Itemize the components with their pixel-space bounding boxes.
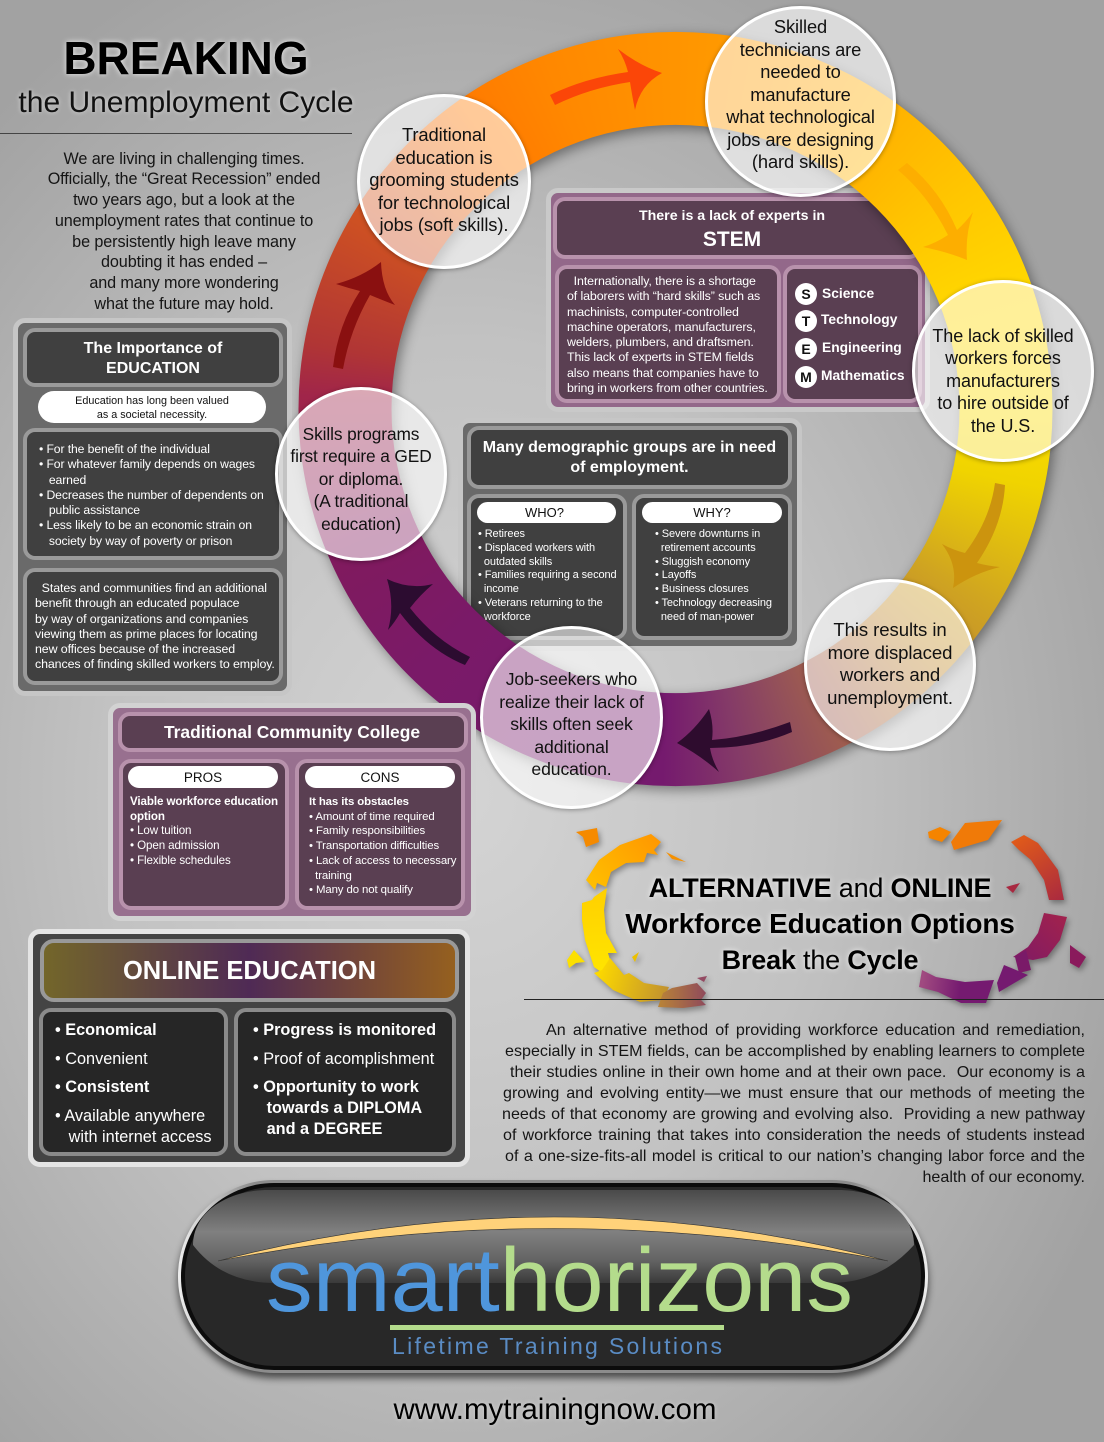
text: alternative method: needs of that economy are growing and evolving also. Providing a new pathway	[502, 1105, 1085, 1123]
circle: traditional education: grooming students	[369, 169, 519, 190]
list: online benefits left: • Economical	[55, 1021, 157, 1039]
fragments: right arc	[919, 820, 1086, 1003]
circle: skilled technicians: needed to	[760, 61, 841, 82]
list: benefits: • For whatever family depends on wages	[39, 457, 255, 471]
legend item: Engineering: E	[801, 341, 811, 357]
circle: lack of skilled workers: to hire outside of	[937, 393, 1069, 413]
subtitle: the Unemployment Cycle	[18, 86, 354, 119]
text: alternative method: their studies online in their own home and at their own pace. Our economy is a	[510, 1063, 1085, 1081]
column: pros: Viable workforce education	[130, 795, 278, 808]
text: shortage of laborers: also means that companies have to	[567, 366, 759, 380]
circle: skills programs: (A traditional	[314, 491, 408, 511]
legend item: Science: Science	[822, 286, 874, 301]
circle: skills programs: Skills programs	[303, 424, 419, 444]
heading: STEM	[553, 197, 921, 259]
legend item: Mathematics: Mathematics	[821, 368, 905, 383]
circle: skills programs	[275, 387, 447, 561]
heading: online education	[40, 939, 459, 1002]
text: alternative method: of workforce training that takes into consideration the needs of students instead	[503, 1126, 1085, 1144]
circle: traditional education: Traditional	[402, 124, 486, 145]
url: www.mytrainingnow.com	[394, 1393, 716, 1426]
circle: skilled technicians: what technological	[726, 106, 875, 127]
column: pros: • Flexible schedules	[130, 854, 231, 867]
heading: STEM: STEM	[703, 228, 761, 251]
horizon arc	[218, 1217, 888, 1261]
text: shortage of laborers	[555, 265, 781, 403]
heading: traditional community college	[118, 712, 468, 752]
list: online benefits right: • Progress is monitored	[253, 1021, 436, 1039]
label: why	[642, 502, 782, 523]
circle: lack of skilled workers	[912, 280, 1094, 462]
list: benefits: public assistance	[49, 503, 140, 517]
heading: importance of education: The Importance of	[84, 340, 222, 357]
heading: demographic groups	[467, 426, 792, 489]
column: who	[467, 494, 627, 640]
circle: traditional education	[357, 94, 531, 269]
text: shortage of laborers: Internationally, there is a shortage	[574, 274, 756, 288]
arrow: bottom	[677, 709, 792, 772]
list: benefits: earned	[49, 473, 86, 487]
column: why: • Business closures	[655, 583, 749, 595]
label: cons	[305, 766, 455, 788]
text: shortage of laborers: of laborers with “hard skills” such as	[567, 289, 760, 303]
text: shortage of laborers: machine operators, manufacturers,	[567, 320, 756, 334]
circle: traditional education: jobs (soft skills).	[380, 214, 508, 235]
list: online benefits right: and a DEGREE	[267, 1120, 382, 1138]
callout: societal necessity: as a societal necessity.	[97, 408, 207, 420]
column: cons: training	[315, 870, 352, 882]
heading: demographic groups: Many demographic groups are in need	[483, 439, 776, 456]
column: who: outdated skills	[484, 556, 552, 568]
callout: societal necessity: Education has long been valued	[75, 395, 229, 407]
list: online benefits left: with internet access	[69, 1128, 212, 1146]
label: cons: CONS	[360, 770, 400, 785]
circle: skills programs: or diploma.	[319, 469, 403, 489]
column: cons: • Amount of time required	[309, 811, 435, 823]
text: alternative method: especially in STEM fields, can be accomplished by enabling learners to complete	[505, 1042, 1085, 1060]
heading: importance of education: EDUCATION	[106, 360, 200, 377]
intro text: and many more wondering	[89, 274, 279, 292]
text: shortage of laborers: welders, plumbers, and draftsmen.	[567, 335, 754, 349]
heading: demographic groups: of employment.	[570, 459, 689, 476]
text: states and communities	[23, 568, 283, 685]
label: pros	[128, 766, 278, 788]
text: states and communities: viewing them as prime places for locating	[35, 627, 257, 641]
arrow: lower left	[387, 579, 470, 665]
list: online benefits right: • Opportunity to work	[253, 1078, 419, 1096]
circle: skills programs: first require a GED	[290, 446, 432, 466]
column: pros: • Low tuition	[130, 824, 191, 837]
circle: skilled technicians: (hard skills).	[752, 151, 849, 172]
intro text: Officially, the “Great Recession” ended	[48, 170, 320, 188]
circle: displaced workers	[804, 579, 976, 751]
text: shortage of laborers: This lack of experts in STEM fields	[567, 350, 754, 364]
circle: traditional education: education is	[396, 147, 492, 168]
list: online benefits right: • Proof of acomplishment	[253, 1050, 434, 1068]
column: cons: • Lack of access to necessary	[309, 855, 456, 867]
text: states and communities: States and communities find an additional	[42, 581, 267, 595]
legend item: Technology: T	[802, 313, 810, 329]
logo: smarthorizons	[172, 1180, 934, 1384]
column: why: retirement accounts	[661, 542, 756, 554]
circle: displaced workers: workers and	[840, 664, 940, 685]
heading: alternative and online: ALTERNATIVE and ONLINE	[649, 873, 991, 903]
intro text: We are living in challenging times.	[64, 150, 304, 168]
panel: demographic groups	[458, 418, 802, 651]
column: who: • Retirees	[478, 528, 525, 540]
circle: displaced workers: unemployment.	[827, 686, 953, 708]
column: who: • Displaced workers with	[478, 542, 595, 554]
STEM legend	[783, 265, 922, 403]
intro text: unemployment rates that continue to	[55, 212, 313, 230]
panel: online education	[28, 929, 470, 1167]
text: alternative method: growing and evolving entity—we must ensure that our methods of meeting the	[503, 1084, 1085, 1102]
cycle ring	[294, 29, 1061, 798]
text: states and communities: benefit through an educated populace	[35, 596, 239, 610]
circle: job-seekers: Job-seekers who	[506, 669, 637, 689]
circle: skilled technicians	[705, 6, 896, 197]
list: benefits: • For the benefit of the individual	[39, 442, 210, 456]
list: online benefits left	[39, 1008, 228, 1156]
legend item: Science	[795, 283, 874, 305]
circle: traditional education: for technological	[378, 192, 510, 213]
column: pros: • Open admission	[130, 839, 219, 852]
list: benefits: society by way of poverty or prison	[49, 534, 232, 548]
column: cons	[295, 759, 465, 910]
text: shortage of laborers: bring in workers from other countries.	[567, 381, 768, 395]
broken cycle graphic	[566, 820, 1090, 1014]
column: why: • Sluggish economy	[655, 556, 750, 568]
text: shortage of laborers: machinists, computer-controlled	[567, 305, 739, 319]
gloss	[193, 1190, 914, 1283]
legend item: Engineering	[795, 338, 902, 360]
heading: importance of education	[23, 328, 283, 387]
column: why: • Layoffs	[655, 569, 696, 581]
label: why: WHY?	[693, 505, 731, 520]
heading: alternative and online: Workforce Education Options	[625, 908, 1015, 939]
column: pros: option	[130, 810, 165, 823]
list: online benefits left: • Consistent	[55, 1078, 149, 1096]
wordmark: smarthorizons	[266, 1231, 853, 1331]
column: cons: • Family responsibilities	[309, 825, 425, 837]
text: states and communities: by way of organizations and companies	[35, 612, 248, 626]
arrow: upper right	[898, 163, 973, 260]
legend item: Technology: Technology	[821, 312, 897, 327]
circle: job-seekers: additional	[534, 737, 609, 757]
text: states and communities: chances of finding skilled workers to employ.	[35, 657, 275, 671]
fragments: left arc	[567, 828, 707, 1008]
list: online benefits right	[234, 1008, 456, 1156]
label: who: WHO?	[525, 505, 564, 520]
tagline: Lifetime Training Solutions	[392, 1333, 722, 1359]
circle: job-seekers: skills often seek	[510, 714, 633, 734]
list: benefits: • Less likely to be an economic strain on	[39, 518, 252, 532]
heading: traditional community college: Traditional Community College	[164, 722, 420, 742]
legend item: Mathematics: M	[800, 369, 812, 385]
circle: lack of skilled workers: The lack of skilled	[932, 326, 1074, 346]
legend item: Science: S	[801, 286, 811, 302]
circle: displaced workers: This results in	[833, 619, 947, 640]
title: BREAKING	[63, 32, 309, 84]
heading: alternative and online	[624, 873, 1016, 976]
intro text: two years ago, but a look at the	[73, 191, 295, 209]
circle: job-seekers: realize their lack of	[499, 692, 644, 712]
legend item: Technology	[795, 310, 898, 332]
text: alternative method	[502, 1021, 1085, 1186]
circle: skills programs: education)	[321, 514, 401, 534]
circle: skilled technicians: technicians are	[740, 39, 861, 60]
heading: alternative and online: Break the Cycle	[722, 945, 918, 975]
label: pros: PROS	[184, 770, 222, 785]
intro text	[48, 150, 320, 313]
column: who: income	[484, 583, 519, 595]
circle: displaced workers: more displaced	[828, 642, 952, 662]
arrow: top	[550, 49, 662, 110]
heading: online education: ONLINE EDUCATION	[123, 957, 376, 985]
column: pros	[119, 759, 289, 910]
callout: societal necessity	[38, 391, 266, 423]
circle: job-seekers: education.	[531, 759, 612, 779]
column: who: • Veterans returning to the	[478, 597, 603, 609]
arrow: lower right	[942, 483, 1005, 588]
circle: lack of skilled workers: manufacturers	[946, 371, 1060, 391]
list: online benefits left: • Convenient	[55, 1050, 148, 1068]
heading: STEM: There is a lack of experts in	[639, 208, 825, 224]
list: online benefits left: • Available anywhere	[55, 1107, 205, 1125]
label: who	[477, 502, 616, 523]
divider	[390, 1325, 724, 1330]
panel: lack of experts in STEM	[546, 188, 930, 412]
intro text: doubting it has ended –	[101, 253, 267, 271]
legend item: Mathematics	[795, 366, 905, 388]
legend item: Engineering: Engineering	[822, 340, 902, 355]
list: benefits: • Decreases the number of dependents on	[39, 488, 264, 502]
list: online benefits right: towards a DIPLOMA	[267, 1099, 422, 1117]
column: cons: • Many do not qualify	[309, 884, 413, 896]
panel: importance of education	[13, 318, 292, 696]
column: who: • Families requiring a second	[478, 569, 617, 581]
text: alternative method: of a one-size-fits-all model is critical to our nation’s changing labor force and the	[505, 1147, 1085, 1165]
column: why: • Severe downturns in	[655, 528, 760, 540]
column: cons: It has its obstacles	[309, 796, 409, 808]
circle: job-seekers	[480, 626, 663, 809]
circle: skilled technicians: manufacture	[750, 84, 851, 105]
arrow: upper left	[333, 262, 395, 369]
circle: skilled technicians: jobs are designing	[727, 129, 874, 150]
circle: lack of skilled workers: workers forces	[945, 348, 1061, 368]
intro text: what the future may hold.	[94, 295, 274, 313]
column: why: • Technology decreasing	[655, 597, 772, 609]
list: benefits	[23, 428, 283, 560]
column: why: need of man-power	[661, 610, 754, 622]
text: alternative method: health of our economy.	[922, 1168, 1085, 1186]
intro text: be persistently high leave many	[72, 233, 296, 251]
text: alternative method: An alternative method of providing workforce education and remediation,	[546, 1021, 1085, 1039]
circle: lack of skilled workers: the U.S.	[971, 416, 1035, 436]
column: who: workforce	[484, 610, 531, 622]
column: cons: • Transportation difficulties	[309, 840, 439, 852]
circle: skilled technicians: Skilled	[774, 16, 827, 37]
panel: traditional community college	[108, 703, 476, 921]
text: states and communities: new offices because of the increased	[35, 642, 235, 656]
column: why	[632, 494, 792, 640]
